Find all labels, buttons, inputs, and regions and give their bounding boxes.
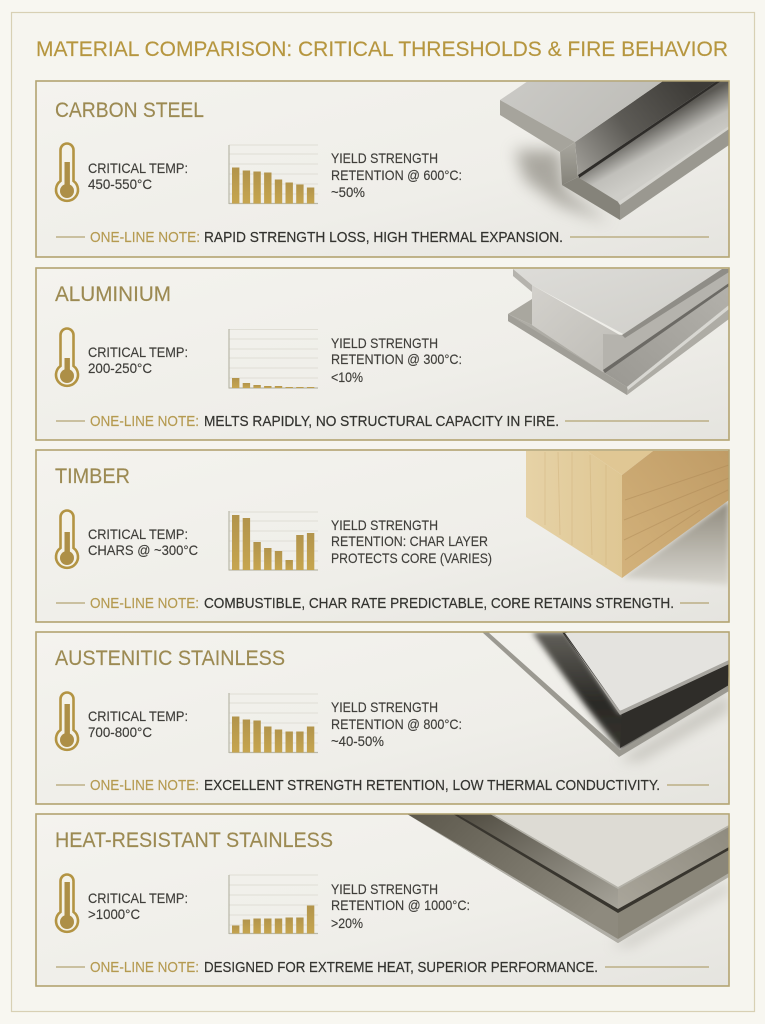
heading: TIMBER: [55, 465, 130, 488]
heading: ALUMINIUM: [55, 283, 171, 306]
one-line note: [56, 960, 709, 976]
bar chart: [229, 875, 318, 934]
yield strength text: RETENTION @ 800°C:: [331, 716, 462, 732]
yield strength text: >20%: [331, 915, 363, 931]
panel: carbon steel: [36, 81, 729, 257]
critical temperature: CRITICAL TEMP:: [88, 344, 188, 360]
yield strength text: YIELD STRENGTH: [331, 699, 438, 715]
one-line note: ONE-LINE NOTE:: [90, 414, 199, 430]
yield strength text: YIELD STRENGTH: [331, 150, 438, 166]
critical temperature: >1000°C: [88, 906, 140, 922]
one-line note: RAPID STRENGTH LOSS, HIGH THERMAL EXPANSION.: [204, 230, 563, 246]
one-line note: ONE-LINE NOTE:: [90, 596, 199, 612]
image: heat-resistant stainless plates: [407, 814, 729, 948]
panel: heat-resistant stainless: [36, 814, 729, 986]
critical temperature: [88, 708, 188, 740]
icon: thermometer: [56, 875, 78, 932]
yield strength text: YIELD STRENGTH: [331, 881, 438, 897]
critical temperature: [88, 526, 198, 558]
critical temperature: [88, 890, 188, 922]
heading: HEAT-RESISTANT STAINLESS: [55, 829, 333, 852]
critical temperature: CHARS @ ~300°C: [88, 542, 198, 558]
icon: thermometer: [56, 511, 78, 568]
icon: thermometer: [56, 693, 78, 750]
one-line note: ONE-LINE NOTE:: [90, 778, 199, 794]
image: carbon steel Z-section: [500, 81, 729, 222]
yield strength text: <10%: [331, 369, 363, 385]
panel: austenitic stainless: [36, 632, 729, 804]
yield strength text: [331, 881, 470, 931]
yield strength text: [331, 150, 462, 200]
icon: thermometer: [56, 144, 78, 201]
image: aluminium I-beam: [508, 269, 729, 395]
yield strength text: YIELD STRENGTH: [331, 517, 438, 533]
one-line note: ONE-LINE NOTE:: [90, 960, 199, 976]
image: timber block: [526, 451, 729, 585]
one-line note: [56, 414, 709, 430]
one-line note: [56, 230, 709, 246]
yield strength text: RETENTION @ 300°C:: [331, 351, 462, 367]
heading: CARBON STEEL: [55, 99, 204, 122]
yield strength text: ~40-50%: [331, 733, 384, 749]
critical temperature: CRITICAL TEMP:: [88, 160, 188, 176]
yield strength text: PROTECTS CORE (VARIES): [331, 550, 492, 566]
bar chart: [229, 329, 318, 388]
title: MATERIAL COMPARISON: CRITICAL THRESHOLDS & FIRE BEHAVIOR: [36, 37, 728, 61]
heading: AUSTENITIC STAINLESS: [55, 647, 285, 670]
one-line note: EXCELLENT STRENGTH RETENTION, LOW THERMAL CONDUCTIVITY.: [204, 778, 660, 794]
yield strength text: YIELD STRENGTH: [331, 335, 438, 351]
one-line note: ONE-LINE NOTE:: [90, 230, 200, 246]
critical temperature: 450-550°C: [88, 176, 152, 192]
one-line note: DESIGNED FOR EXTREME HEAT, SUPERIOR PERFORMANCE.: [204, 960, 598, 976]
one-line note: MELTS RAPIDLY, NO STRUCTURAL CAPACITY IN FIRE.: [204, 414, 559, 430]
critical temperature: CRITICAL TEMP:: [88, 890, 188, 906]
yield strength text: [331, 335, 462, 385]
critical temperature: [88, 160, 188, 192]
yield strength text: RETENTION @ 1000°C:: [331, 897, 470, 913]
bar chart: [229, 693, 318, 753]
critical temperature: 200-250°C: [88, 360, 152, 376]
one-line note: COMBUSTIBLE, CHAR RATE PREDICTABLE, CORE RETAINS STRENGTH.: [204, 596, 674, 612]
yield strength text: RETENTION @ 600°C:: [331, 167, 462, 183]
critical temperature: CRITICAL TEMP:: [88, 708, 188, 724]
image: austenitic stainless plates: [482, 632, 729, 762]
critical temperature: [88, 344, 188, 376]
panel: aluminium: [36, 268, 729, 440]
bar chart: [229, 145, 318, 204]
icon: thermometer: [56, 328, 78, 386]
yield strength text: ~50%: [331, 184, 365, 200]
yield strength text: [331, 517, 492, 566]
yield strength text: [331, 699, 462, 749]
panel: timber: [36, 450, 729, 622]
critical temperature: CRITICAL TEMP:: [88, 526, 188, 542]
bar chart: [229, 511, 318, 570]
critical temperature: 700-800°C: [88, 724, 152, 740]
yield strength text: RETENTION: CHAR LAYER: [331, 533, 488, 549]
